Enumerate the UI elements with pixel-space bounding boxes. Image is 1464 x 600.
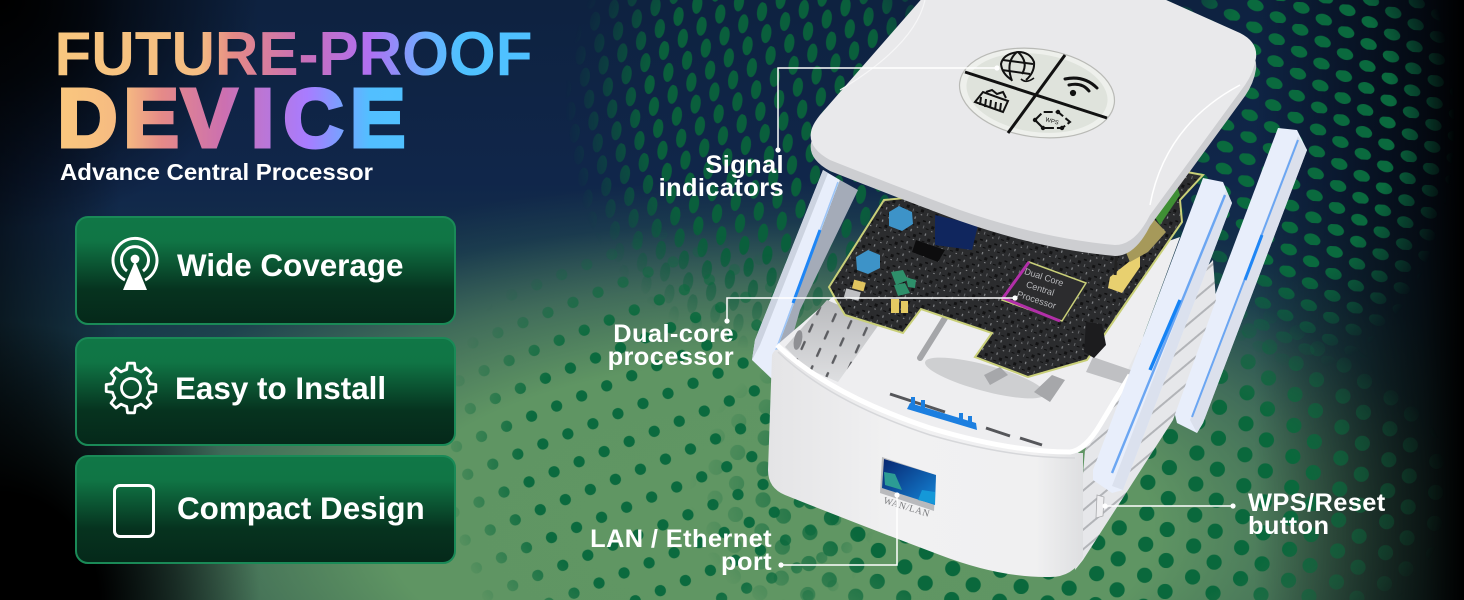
- inner wall and floor: [777, 237, 1180, 458]
- green parts: [891, 270, 916, 296]
- label: WPS/Reset button: WPS/Reset: [1248, 489, 1386, 517]
- antenna: front right: [1093, 178, 1232, 493]
- icon: wifi: [1065, 78, 1097, 95]
- blue capacitors: [856, 206, 913, 274]
- leader lines: [724, 65, 1236, 568]
- base front housing: [768, 345, 1130, 577]
- label: dual-core processor: processor: [608, 342, 734, 370]
- processor chip: Processor: [1016, 289, 1057, 311]
- top slots and blue clips: [890, 394, 1042, 445]
- processor chip: [1002, 262, 1086, 321]
- label: LAN / Ethernet port: port: [721, 548, 772, 576]
- label: signal indicators: Signal: [705, 151, 784, 179]
- side vented wall: [1075, 260, 1216, 570]
- LAN port: [880, 457, 936, 520]
- label: WPS/Reset button: [1248, 489, 1386, 540]
- title: gradient heading: DEVICE: [58, 72, 405, 164]
- yellow pin header: [1108, 180, 1180, 293]
- button: Wide Coverage: [75, 216, 456, 325]
- icon: gear: [104, 362, 158, 414]
- button: Easy to Install: Easy to Install: [175, 371, 386, 406]
- processor chip: Dual Core: [1023, 266, 1065, 288]
- blue inductor: [935, 215, 978, 250]
- small parts: [844, 280, 908, 313]
- circuit board: [829, 172, 1203, 377]
- antenna: left: [752, 170, 858, 380]
- WPS/reset button: [1096, 495, 1104, 518]
- lid: [811, 0, 1256, 256]
- black connector: [1084, 322, 1106, 358]
- LAN port: WAN/LAN: [882, 496, 931, 520]
- button: Wide Coverage: Wide Coverage: [177, 248, 404, 283]
- device: exploded wifi extender: [752, 0, 1307, 577]
- label: dual-core processor: [608, 320, 734, 370]
- label: LAN / Ethernet port: LAN / Ethernet: [590, 525, 772, 553]
- icon: globe: [1001, 52, 1034, 81]
- subtitle: Advance Central Processor: [60, 159, 373, 185]
- label: dual-core processor: Dual-core: [613, 320, 734, 348]
- icon: ethernet: [975, 90, 1008, 112]
- button: Easy to Install: [75, 337, 456, 446]
- label: WPS/Reset button: button: [1248, 512, 1329, 540]
- signal indicator panel: [954, 39, 1120, 147]
- antenna: rear right: [1173, 128, 1307, 433]
- icon: signal tower: [112, 236, 158, 290]
- button: Compact Design: Compact Design: [177, 491, 425, 526]
- icon: compact device outline: [113, 484, 155, 538]
- processor chip: Central: [1025, 279, 1056, 298]
- icon: WPS: WPS: [1044, 117, 1059, 127]
- title: gradient heading: FUTURE-PROOF: [54, 20, 532, 89]
- title: gradient heading: [54, 20, 532, 164]
- button: Compact Design: [75, 455, 456, 564]
- halftone dot background: [451, 0, 1450, 600]
- icon: WPS: [1033, 110, 1070, 130]
- label: signal indicators: indicators: [659, 174, 784, 202]
- label: LAN / Ethernet port: [590, 525, 772, 576]
- label: signal indicators: [659, 151, 784, 202]
- dark IC: [912, 240, 945, 262]
